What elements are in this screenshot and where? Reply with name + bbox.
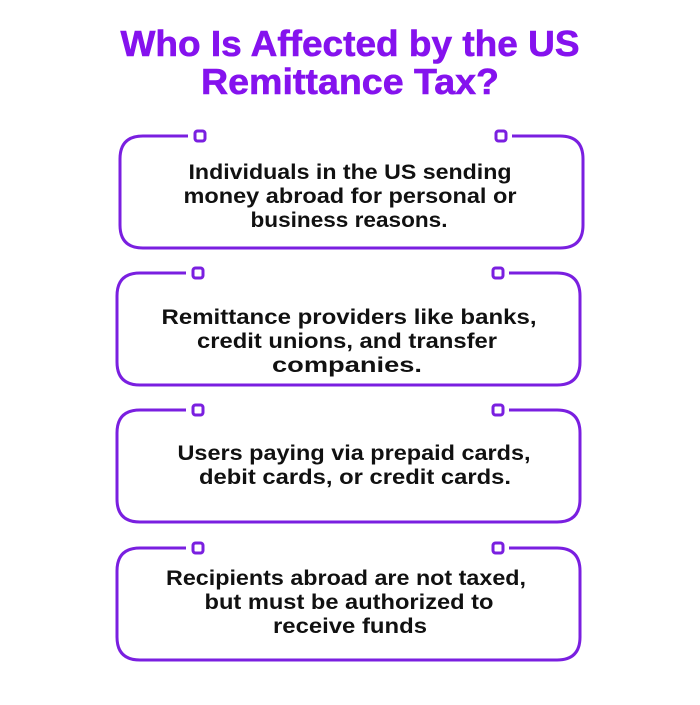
panel: recipients: Recipients abroad are not taxed, <box>166 567 526 590</box>
panel: card users: Users paying via prepaid cards, <box>178 442 530 465</box>
title <box>120 23 580 102</box>
panel: providers: credit unions, and transfer <box>197 330 497 353</box>
panel: individuals <box>120 131 583 248</box>
title: Remittance Tax? <box>201 61 499 102</box>
panel: providers: Remittance providers like banks, <box>162 306 536 329</box>
panel: individuals: money abroad for personal or <box>184 185 516 208</box>
title: Who Is Affected by the US <box>120 23 580 64</box>
panel: card users: debit cards, or credit cards. <box>199 466 511 489</box>
panel: card users <box>117 405 580 522</box>
panel: recipients <box>117 543 580 660</box>
panel: recipients: but must be authorized to <box>204 591 494 614</box>
panel: providers: companies. <box>272 354 422 377</box>
panel: individuals: Individuals in the US sending <box>188 161 512 184</box>
panel: recipients: receive funds <box>273 615 427 638</box>
panel: individuals: business reasons. <box>250 209 448 232</box>
panel: providers <box>117 268 580 385</box>
